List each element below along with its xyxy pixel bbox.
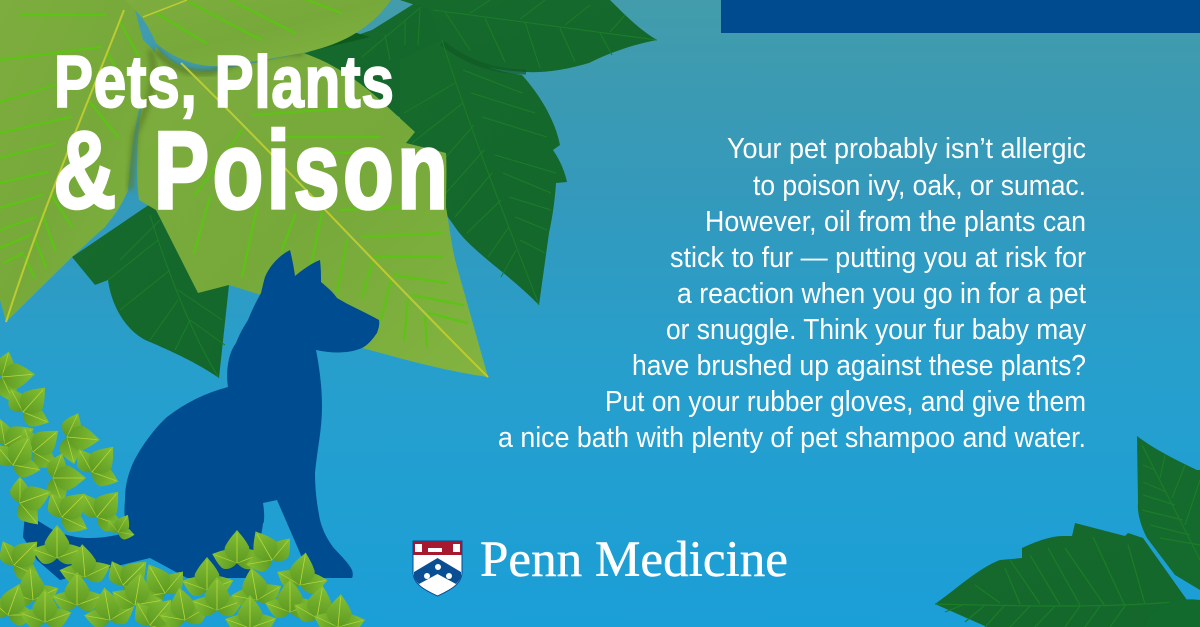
body text block: a nice bath with plenty of pet shampoo and water. (498, 422, 1086, 454)
body text block: a reaction when you go in for a pet (677, 278, 1086, 310)
leaf: top light (120, 0, 391, 66)
body text block: Put on your rubber gloves, and give them (605, 386, 1086, 418)
leaf: dark behind (300, 0, 445, 130)
body text block: Your pet probably isn’t allergic (727, 133, 1086, 165)
body text block: to poison ivy, oak, or sumac. (753, 170, 1086, 202)
body text block: have brushed up against these plants? (632, 350, 1086, 382)
leaf: dark top right (400, 0, 657, 72)
wordmark: Penn Medicine (480, 532, 788, 588)
title (53, 42, 452, 232)
body text block: or snuggle. Think your fur baby may (666, 314, 1086, 346)
cluster: ground leaves (0, 516, 371, 627)
body text block (498, 133, 1086, 454)
leaf: vertical dark (1137, 436, 1200, 590)
leaf: centre light (137, 47, 488, 377)
icon: shield (413, 541, 462, 596)
poison ivy leaf clusters (0, 346, 371, 627)
title: ampersand: & (53, 110, 117, 232)
foliage: large leaves top left (0, 0, 657, 378)
leaf: far left light (0, 0, 160, 322)
leaf: corner dark (1145, 599, 1200, 627)
foliage: bottom right leaves (935, 436, 1200, 627)
dog silhouette (23, 250, 379, 580)
title line: Pets, Plants: Pets, Plants (54, 42, 395, 124)
leaf: lower dark (72, 200, 229, 378)
title: Poison: Poison (154, 108, 452, 232)
logo: Penn Medicine (413, 532, 788, 596)
body text block: However, oil from the plants can (705, 206, 1086, 238)
leaf: big dark right (400, 40, 567, 305)
leaf: horizontal dark (935, 523, 1200, 627)
top blue bar (721, 0, 1200, 33)
cluster: upper left sprigs (0, 346, 143, 546)
body text block: stick to fur — putting you at risk for (670, 242, 1086, 274)
